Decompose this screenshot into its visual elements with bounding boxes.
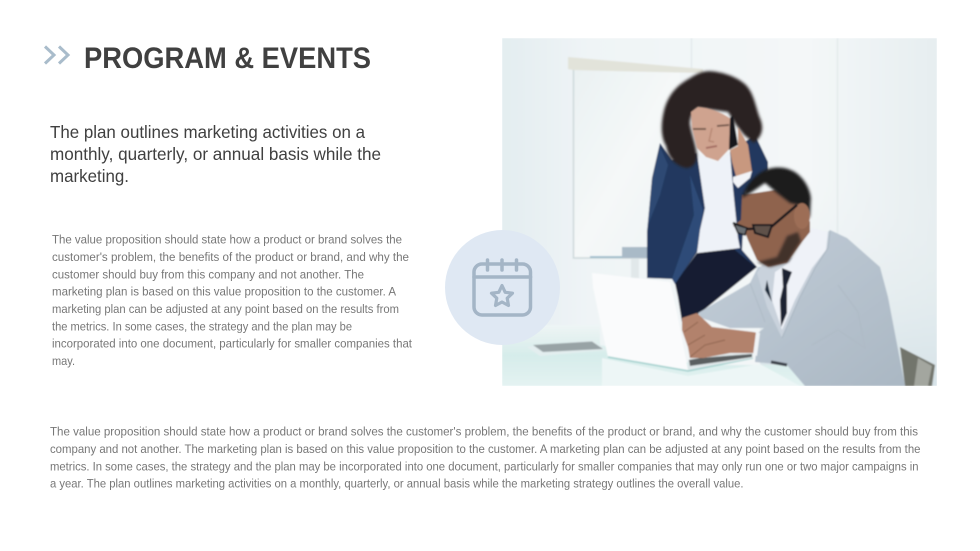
desk (502, 325, 805, 386)
man: hands (682, 313, 758, 358)
body paragraph: full width: a year. The plan outlines marketing activities on a monthly, quarterly, or annual basis while the marketing strategy outlines the overall value. (50, 477, 744, 491)
icon: double chevron (45, 46, 68, 64)
man: suit (698, 228, 905, 386)
body paragraph: full width: The value proposition should state how a product or brand solves the customer's problem, the benefits of the product or brand, and why the customer should buy from this (50, 424, 918, 438)
body paragraph: value proposition: The value proposition should state how a product or brand solves the (52, 232, 402, 246)
body paragraph: full width: company and not another. The marketing plan is based on this value proposition to the customer. A marketing plan can be adjusted at any point based on the results from the (50, 442, 921, 456)
woman: trousers (675, 248, 757, 322)
laptop (602, 358, 800, 386)
body paragraph: value proposition (52, 232, 413, 368)
chair (900, 347, 935, 386)
man: head (733, 190, 810, 267)
body paragraph: value proposition: customer should buy from this company and not another. The (52, 267, 364, 281)
woman: jacket (647, 135, 768, 284)
body paragraph: value proposition: marketing plan can be adjusted at any point based on the results from (52, 302, 399, 316)
body paragraph: full width (50, 424, 921, 491)
subheading text block: monthly, quarterly, or annual basis while the (50, 144, 381, 164)
subheading text block (50, 122, 381, 186)
man: sleeve button (771, 362, 787, 365)
photo: two colleagues working at a laptop (502, 38, 937, 386)
woman: shirt (697, 152, 740, 253)
woman: phone and hand (729, 115, 738, 150)
woman: hair (662, 71, 762, 168)
body paragraph: value proposition: incorporated into one document, particularly for smaller companies that (52, 337, 413, 351)
man: glasses (733, 205, 797, 229)
body paragraph: full width: metrics. In some cases, the strategy and the plan may be incorporated into one document, particularly for smaller companies that may only run one or two major campaigns in (50, 459, 918, 473)
subheading text block: marketing. (50, 166, 129, 186)
body paragraph: value proposition: customer's problem, the benefits of the product or brand, and why the (52, 250, 409, 264)
man: shirt (772, 228, 828, 330)
body paragraph: value proposition: the metrics. In some cases, the strategy and the plan may be (52, 319, 352, 333)
woman: face (691, 107, 733, 161)
body paragraph: value proposition: may. (52, 354, 75, 368)
whiteboard (573, 70, 680, 258)
title: PROGRAM & EVENTS (84, 42, 371, 75)
wall (502, 38, 937, 386)
icon: calendar with star in circle (445, 230, 560, 345)
body paragraph: value proposition: marketing plan is based on this value proposition to the customer. A (52, 285, 397, 299)
tablet (527, 340, 606, 356)
man: tie (780, 268, 792, 327)
subheading text block: The plan outlines marketing activities on a (50, 122, 365, 142)
